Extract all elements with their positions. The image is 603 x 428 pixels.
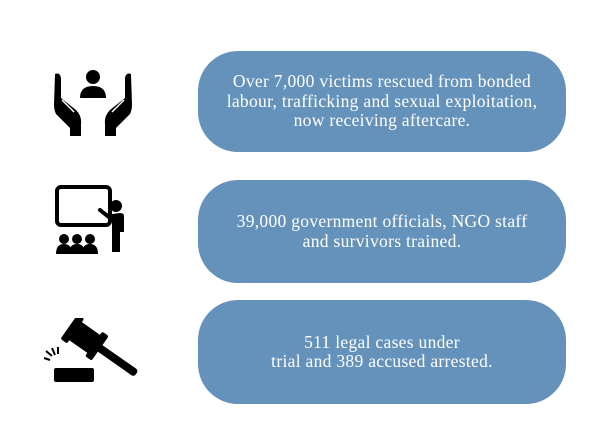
panel: officials trained: and survivors trained. — [303, 230, 461, 250]
panel: victims rescued — [198, 51, 566, 152]
panel: victims rescued: Over 7,000 victims rescued from bonded — [233, 71, 531, 91]
panel: legal cases — [198, 300, 566, 404]
panel: officials trained: 39,000 government officials, NGO staff — [237, 211, 527, 231]
icon: gavel — [44, 318, 138, 382]
icon: trainer with audience — [55, 185, 124, 254]
panel: legal cases: trial and 389 accused arrested. — [271, 351, 493, 371]
panel: victims rescued: labour, trafficking and sexual exploitation, — [227, 91, 537, 111]
panel: legal cases: 511 legal cases under — [304, 332, 460, 352]
panel: officials trained — [198, 180, 566, 283]
icon: hands holding person — [54, 70, 132, 136]
panel: victims rescued: now receiving aftercare. — [294, 110, 470, 130]
